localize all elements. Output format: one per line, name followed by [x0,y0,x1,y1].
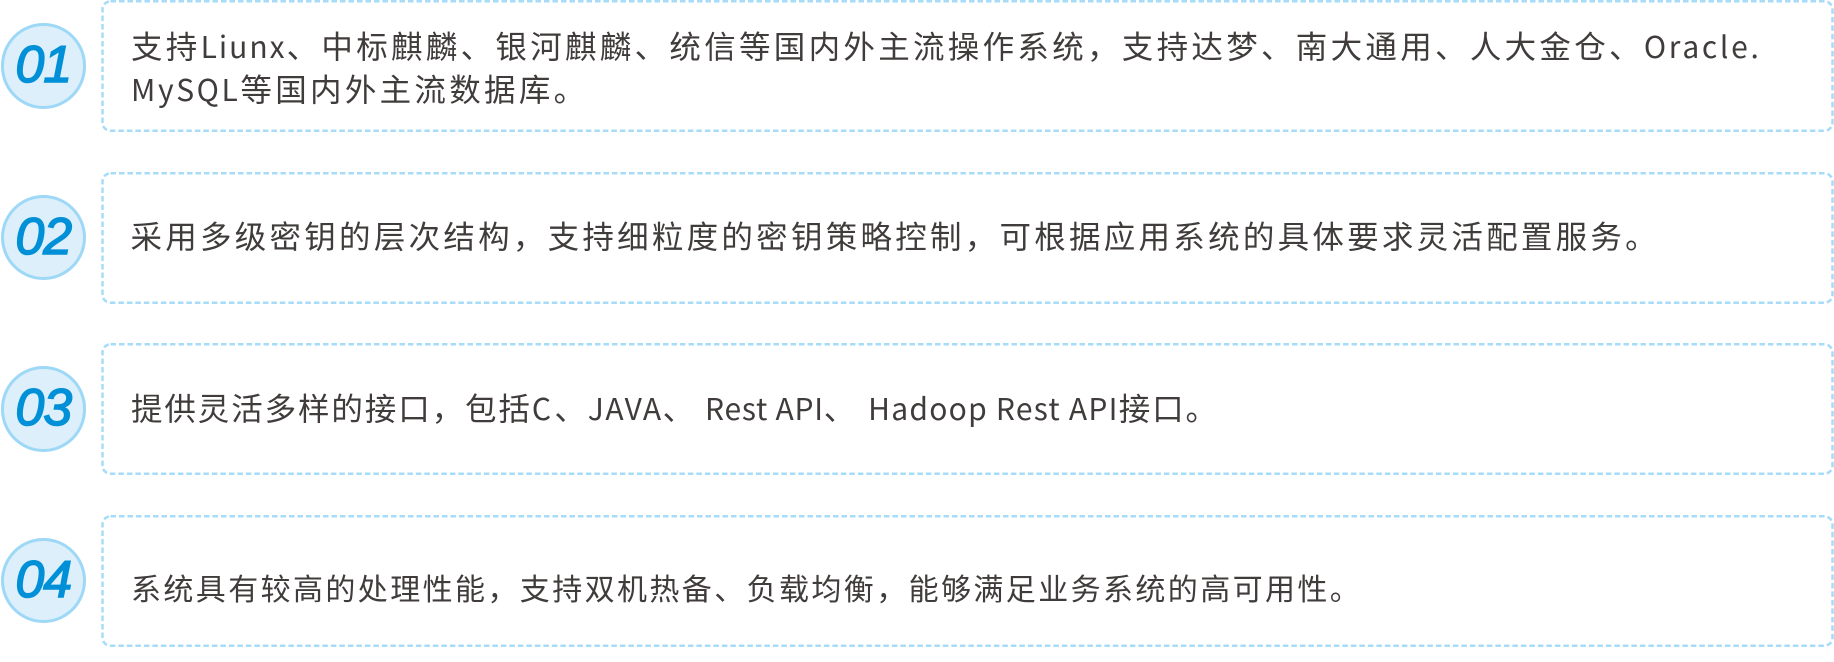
number badge 02: 02 [15,208,71,266]
text 03: 提供灵活多样的接口，包括C、JAVA、 Rest API、 Hadoop Rest API接口。 [131,384,1219,430]
dashed card 03 [101,343,1834,475]
number badge 04: 04 [15,551,71,609]
dashed card 04 [101,515,1834,647]
dashed card 02 [101,172,1834,304]
text 01: MySQL等国内外主流数据库。 [131,65,588,111]
dashed card 01 [101,0,1834,132]
text 01 [131,22,1762,111]
item 01 [1,0,1834,132]
number badge 01: 01 [15,36,71,94]
item 04 [1,515,1834,647]
number badge 04 [0,538,86,623]
number badge 03 [0,366,86,452]
item 03 [1,343,1834,475]
text 04: 系统具有较高的处理性能，支持双机热备、负载均衡，能够满足业务系统的高可用性。 [131,564,1362,608]
number badge 01 [0,23,86,109]
item 02 [1,172,1834,304]
number badge 02 [0,195,86,280]
text 01: 支持Liunx、中标麒麟、银河麒麟、统信等国内外主流操作系统，支持达梦、南大通用、人大金仓、Oracle. [131,22,1762,68]
text 02: 采用多级密钥的层次结构，支持细粒度的密钥策略控制，可根据应用系统的具体要求灵活配置服务。 [130,212,1660,258]
number badge 03: 03 [15,379,71,437]
